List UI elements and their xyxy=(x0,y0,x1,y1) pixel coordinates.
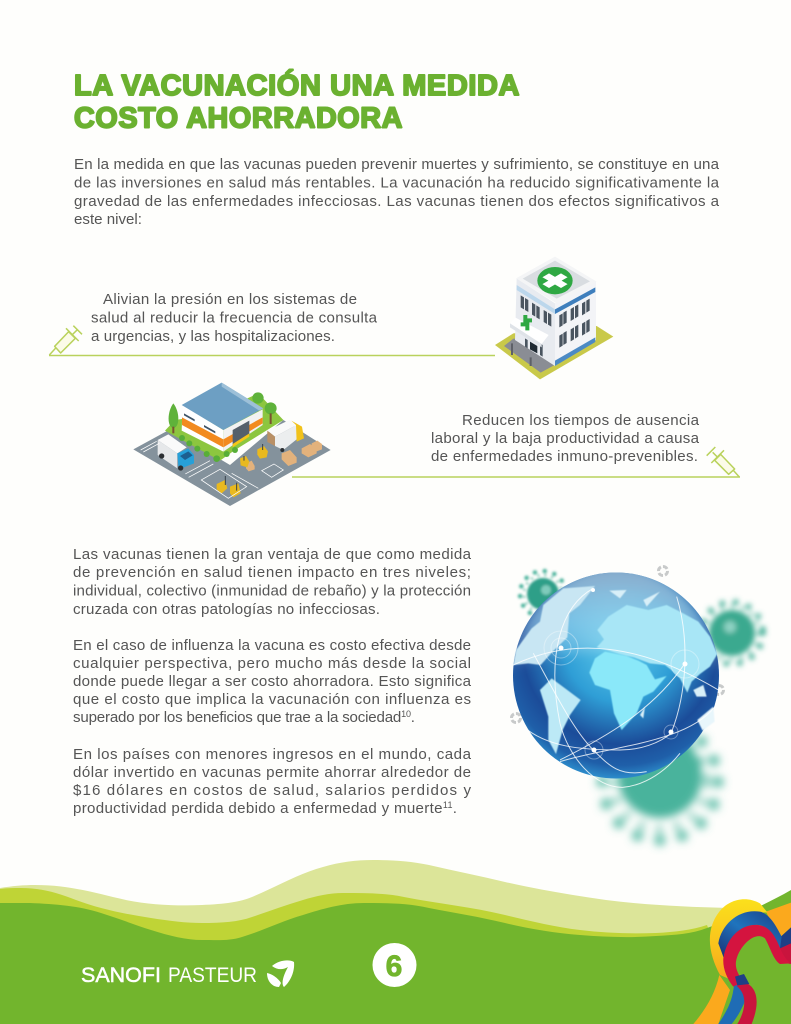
body paragraph: influenza: En el caso de influenza la vacuna es costo efectiva desde xyxy=(73,637,471,654)
footer wave: lime layer xyxy=(0,888,720,960)
lower tail xyxy=(693,975,730,1024)
title: COSTO AHORRADORA xyxy=(74,102,403,134)
body paragraph: three levels xyxy=(73,546,472,618)
forklifts xyxy=(217,446,268,497)
footer wave: pale green layer xyxy=(0,860,730,940)
right rising band xyxy=(766,903,791,937)
icon: small gray particles xyxy=(512,566,724,722)
parking lines xyxy=(141,441,283,498)
main loop red xyxy=(723,925,791,987)
body paragraph: three levels: cruzada con otras patologías no infecciosas. xyxy=(73,601,380,618)
icon: hospital building xyxy=(495,257,613,379)
cargo boxes xyxy=(246,441,322,471)
callout: absence from work xyxy=(431,412,700,465)
icon: upper left virus xyxy=(520,571,566,617)
callout: hospital pressure: Alivian la presión en los sistemas de xyxy=(103,291,357,308)
body paragraph: influenza: que el costo que implica la vacunación con influenza es xyxy=(73,691,471,708)
body paragraph: influenza: donde puede llegar a ser costo ahorradora. Esto significa xyxy=(73,673,472,690)
trees xyxy=(169,392,277,433)
icon: right virus xyxy=(701,602,763,664)
icon: warehouse and loading yard xyxy=(133,383,331,506)
arrow line: right syringe connector xyxy=(292,476,740,478)
continent: Australia xyxy=(697,707,715,731)
yellow truck xyxy=(267,420,304,452)
main loop yellow xyxy=(710,899,767,980)
body paragraph: low income countries: . xyxy=(453,800,457,817)
network arcs xyxy=(513,588,718,787)
body paragraph: three levels: individual, colectivo (inmunidad de rebaño) y la protección xyxy=(73,582,471,600)
logo: Sanofi Pasteur: PASTEUR xyxy=(168,964,257,987)
body paragraph: low income countries: 11 xyxy=(443,800,452,810)
title xyxy=(74,68,520,134)
callout: absence from work: de enfermedades inmuno-prevenibles. xyxy=(431,448,698,465)
warehouse building xyxy=(182,383,263,452)
callout: hospital pressure: a urgencias, y las hospitalizaciones. xyxy=(91,328,335,345)
icon: right syringe xyxy=(707,447,739,477)
body paragraph: influenza: . xyxy=(411,709,415,726)
intro paragraph xyxy=(74,156,720,228)
continent: South America xyxy=(540,678,581,754)
body paragraph: low income countries: $16 dólares en costos de salud, salarios perdidos y xyxy=(73,782,471,799)
footer wave: main green xyxy=(0,890,791,1024)
intro paragraph: de las inversiones en salud más rentables. La vacunación ha reducido significativamente la xyxy=(74,174,720,192)
arrow line: left syringe connector xyxy=(49,354,495,356)
callout: hospital pressure: salud al reducir la frecuencia de consulta xyxy=(91,310,378,326)
body paragraph: three levels: de prevención en salud tienen impacto en tres niveles; xyxy=(73,564,471,581)
icon: sanofi bird xyxy=(267,960,294,987)
continent: North America xyxy=(513,586,595,665)
body paragraph: influenza xyxy=(73,637,472,726)
icon: left syringe xyxy=(49,326,82,355)
body paragraph: influenza: 10 xyxy=(401,709,411,719)
ribbon: Colombian flag xyxy=(693,899,791,1024)
callout: hospital pressure xyxy=(91,291,378,345)
logo: Sanofi Pasteur: SANOFI xyxy=(81,964,161,987)
body paragraph: three levels: Las vacunas tienen la gran ventaja de que como medida xyxy=(73,546,472,563)
callout: absence from work: Reducen los tiempos de ausencia xyxy=(462,412,700,429)
body paragraph: influenza: superado por los beneficios que trae a la sociedad xyxy=(73,709,401,726)
body paragraph: low income countries: productividad perdida debido a enfermedad y muerte xyxy=(73,800,443,817)
icon: green hospital sign xyxy=(521,315,532,330)
body paragraph: low income countries: En los países con menores ingresos en el mundo, cada xyxy=(73,746,472,763)
intro paragraph: gravedad de las enfermedades infecciosas. Las vacunas tienen dos efectos significativos a xyxy=(74,193,720,210)
callout: absence from work: laboral y la baja productividad a causa xyxy=(431,430,700,447)
page number badge: 6 xyxy=(386,950,402,983)
page number badge xyxy=(372,943,416,987)
body paragraph: influenza: cualquier perspectiva, pero mucho más desde la social xyxy=(73,655,471,672)
intro paragraph: este nivel: xyxy=(74,211,142,228)
title: LA VACUNACIÓN UNA MEDIDA xyxy=(74,68,520,102)
logo: Sanofi Pasteur xyxy=(81,960,294,987)
body paragraph: low income countries: dólar invertido en vacunas permite ahorrar alrededor de xyxy=(73,764,471,781)
continent: Africa xyxy=(589,652,667,730)
icon: green roof cross badge xyxy=(536,267,574,294)
body paragraph: low income countries xyxy=(73,746,472,817)
icon: large blurred virus xyxy=(602,724,718,840)
illustration: virus particles and globe xyxy=(505,565,763,840)
blue truck xyxy=(158,434,194,471)
main loop blue xyxy=(718,911,782,958)
intro paragraph: En la medida en que las vacunas pueden prevenir muertes y sufrimiento, se constituye en una xyxy=(74,156,720,173)
continent: Eurasia xyxy=(597,605,717,693)
icon: globe xyxy=(505,565,725,787)
